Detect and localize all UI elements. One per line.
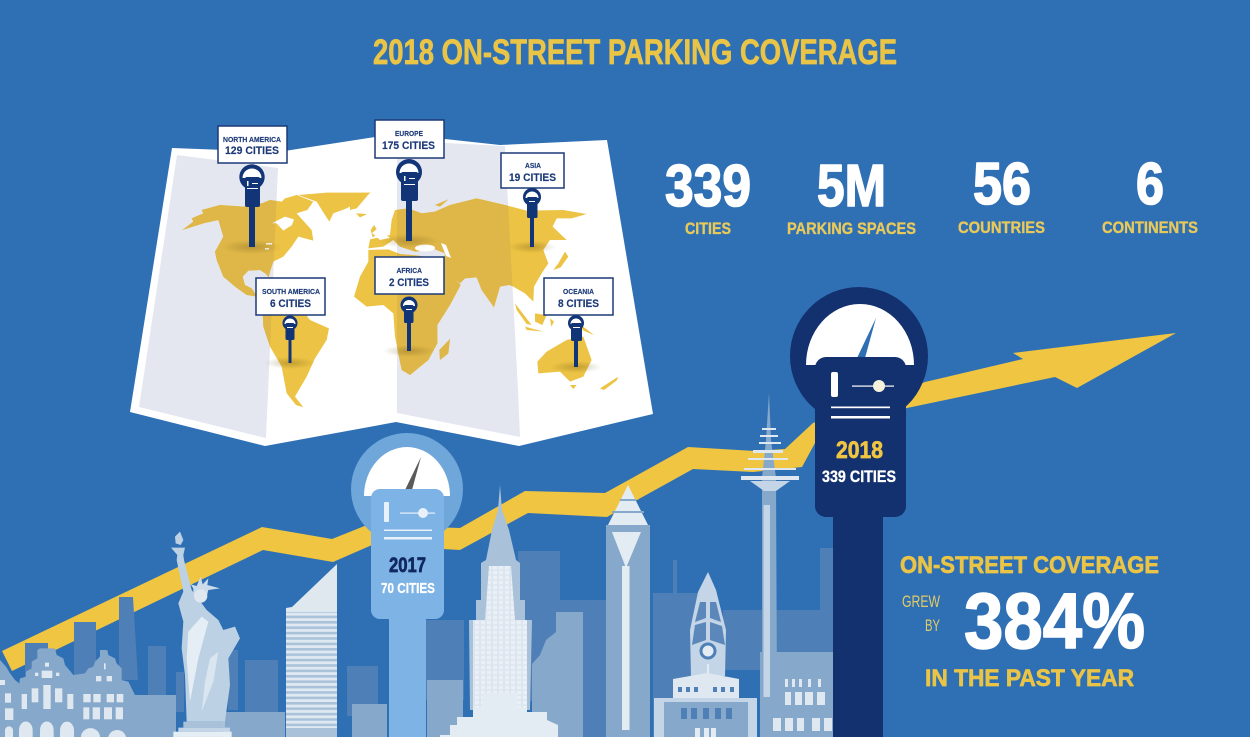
label: North America: 129 CITIES <box>225 145 279 157</box>
stat: countries <box>958 151 1045 237</box>
meter: 2017 <box>351 433 463 737</box>
building: striped tower <box>286 564 337 737</box>
pin: Europe <box>379 159 439 248</box>
icon: Statue of Liberty <box>171 532 240 737</box>
pin: South America <box>264 316 316 369</box>
pin: North America <box>222 164 282 254</box>
label: Europe: 175 CITIES <box>382 140 435 152</box>
label: Africa: AFRICA <box>396 266 423 275</box>
stat: cities: 339 <box>665 153 751 219</box>
skyline: background buildings <box>25 548 833 737</box>
pin: Africa <box>383 296 435 357</box>
stat: parking spaces <box>787 153 916 238</box>
label: Asia: ASIA <box>525 161 542 170</box>
pin: Asia <box>508 188 556 253</box>
stat: cities <box>665 153 751 238</box>
land masses <box>182 193 618 407</box>
2018 label: 2018 <box>836 437 883 464</box>
callout: coverage growth <box>900 552 1159 692</box>
callout: coverage growth: GREW <box>902 592 940 611</box>
callout: coverage growth: 384% <box>964 576 1145 665</box>
label: Africa <box>375 257 444 294</box>
label: Europe <box>375 120 444 158</box>
stat: countries: COUNTRIES <box>958 219 1045 237</box>
label: North America: NORTH AMERICA <box>223 135 282 144</box>
stat: continents: 6 <box>1136 151 1164 217</box>
stat: countries: 56 <box>973 151 1031 217</box>
label: South America: SOUTH AMERICA <box>262 287 321 296</box>
building: left gabled houses <box>0 648 176 737</box>
stat: continents: CONTINENTS <box>1102 219 1198 237</box>
2017 label: 2017 <box>389 554 426 577</box>
building: church <box>654 572 757 737</box>
callout: coverage growth: IN THE PAST YEAR <box>925 665 1134 692</box>
pin: Oceania <box>550 315 602 373</box>
stat: continents <box>1102 151 1198 237</box>
map fold shading <box>139 143 520 438</box>
title: 2018 ON-STREET PARKING COVERAGE <box>373 33 897 72</box>
label: Asia <box>501 153 564 188</box>
stat: parking spaces: PARKING SPACES <box>787 220 916 238</box>
callout: coverage growth: BY <box>925 616 940 635</box>
70 cities label: 70 CITIES <box>381 580 435 597</box>
skyline: mid buildings <box>223 525 833 737</box>
label: North America <box>218 126 287 163</box>
label: Oceania <box>544 278 613 315</box>
label: Africa: 2 CITIES <box>389 277 429 289</box>
stat: cities: CITIES <box>685 220 731 238</box>
339 cities label: 339 CITIES <box>822 468 896 486</box>
label: South America <box>256 278 325 315</box>
meter: 2018 <box>790 287 928 737</box>
label: South America: 6 CITIES <box>270 298 311 310</box>
growth arrow <box>2 333 1176 671</box>
building: Chrysler tower <box>440 485 558 737</box>
building: TV tower <box>741 393 799 697</box>
building windows: right block <box>773 679 832 731</box>
label: Oceania: OCEANIA <box>563 287 595 296</box>
inland seas <box>265 228 451 258</box>
building: Frankfurt tower <box>608 485 648 730</box>
map sheet <box>130 137 653 446</box>
label: Oceania: 8 CITIES <box>558 298 599 310</box>
label: Asia: 19 CITIES <box>509 172 556 184</box>
stat: parking spaces: 5M <box>817 153 886 219</box>
callout: coverage growth: ON-STREET COVERAGE <box>900 552 1159 579</box>
label: Europe: EUROPE <box>395 129 423 138</box>
panel: world map <box>130 120 653 446</box>
